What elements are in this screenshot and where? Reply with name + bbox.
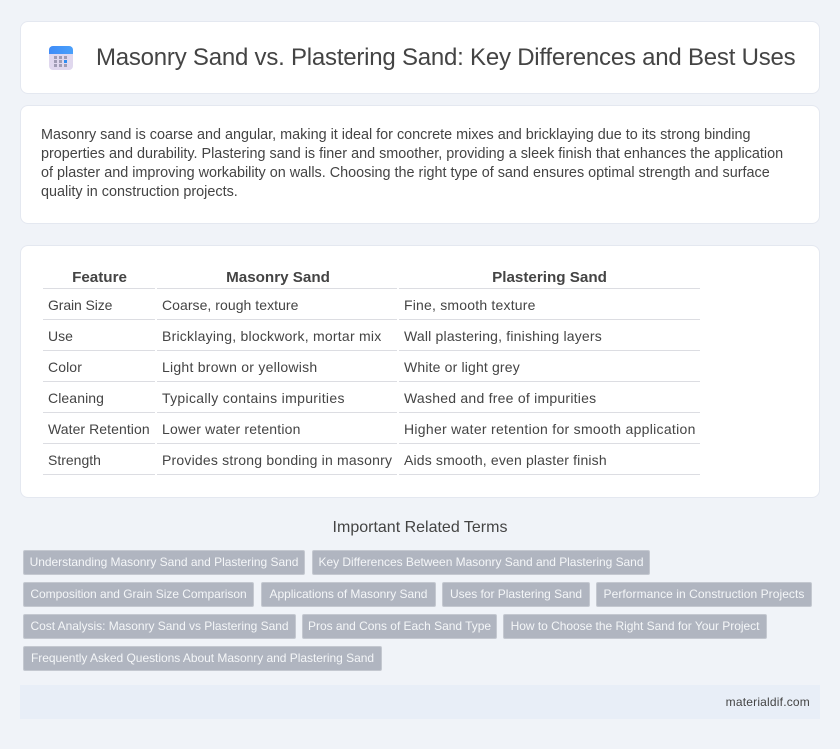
row: grain size xyxy=(48,297,536,313)
tag: Frequently Asked Questions About Masonry and Plastering Sand xyxy=(31,651,374,665)
tag: How to Choose the Right Sand for Your Project xyxy=(511,619,759,633)
tag: Understanding Masonry Sand and Plastering Sand xyxy=(30,555,298,569)
tag xyxy=(23,550,305,575)
table header xyxy=(72,269,607,286)
row: cleaning: Washed and free of impurities xyxy=(404,390,596,406)
intro paragraph: quality in construction projects. xyxy=(41,184,238,200)
row: strength xyxy=(48,452,607,468)
row: cleaning xyxy=(48,390,596,406)
table header: Feature xyxy=(72,269,127,286)
tag: Uses for Plastering Sand xyxy=(450,587,582,601)
tag xyxy=(503,614,767,639)
row: grain size: Fine, smooth texture xyxy=(404,297,536,313)
tag xyxy=(312,550,650,575)
table header: Masonry Sand xyxy=(226,269,330,286)
tag: Pros and Cons of Each Sand Type xyxy=(308,619,491,633)
row: use: Wall plastering, finishing layers xyxy=(404,328,602,344)
intro paragraph: Masonry sand is coarse and angular, making it ideal for concrete mixes and bricklaying due to its strong binding xyxy=(41,127,751,143)
row: color: White or light grey xyxy=(404,359,520,375)
tag: Composition and Grain Size Comparison xyxy=(30,587,247,601)
row: strength: Aids smooth, even plaster finish xyxy=(404,452,607,468)
panel: comparison table xyxy=(20,245,820,498)
tag xyxy=(23,582,254,607)
title: Masonry Sand vs. Plastering Sand: Key Differences and Best Uses xyxy=(96,44,795,71)
tag xyxy=(23,614,296,639)
row: use: Use xyxy=(48,328,73,344)
panel: intro text xyxy=(20,105,820,224)
footer bar xyxy=(20,685,820,719)
related terms heading: Important Related Terms xyxy=(333,519,507,536)
footer source: materialdif.com xyxy=(726,695,810,709)
tag xyxy=(442,582,590,607)
row: grain size: Coarse, rough texture xyxy=(162,297,298,313)
row: use xyxy=(48,328,602,344)
row: water retention: Lower water retention xyxy=(162,421,301,437)
row: water retention: Higher water retention for smooth application xyxy=(404,421,696,437)
tag xyxy=(596,582,812,607)
row: strength: Strength xyxy=(48,452,101,468)
header panel xyxy=(20,21,820,94)
row: water retention xyxy=(48,421,696,437)
tag xyxy=(23,646,382,671)
row: color: Light brown or yellowish xyxy=(162,359,317,375)
intro paragraph: properties and durability. Plastering sand is finer and smoother, providing a sleek finish that enhances the application xyxy=(41,146,783,162)
row: color: Color xyxy=(48,359,82,375)
icon: calendar xyxy=(49,46,73,70)
tag: Cost Analysis: Masonry Sand vs Plastering Sand xyxy=(30,619,289,633)
row: cleaning: Typically contains impurities xyxy=(162,390,345,406)
row: cleaning: Cleaning xyxy=(48,390,104,406)
intro paragraph: of plaster and improving workability on walls. Choosing the right type of sand ensures optimal strength and surface xyxy=(41,165,770,181)
row: grain size: Grain Size xyxy=(48,297,112,313)
row: water retention: Water Retention xyxy=(48,421,150,437)
tag: Performance in Construction Projects xyxy=(604,587,804,601)
row: strength: Provides strong bonding in masonry xyxy=(162,452,392,468)
tag: Applications of Masonry Sand xyxy=(270,587,427,601)
row: use: Bricklaying, blockwork, mortar mix xyxy=(162,328,381,344)
table header: Plastering Sand xyxy=(492,269,607,286)
tag: Key Differences Between Masonry Sand and Plastering Sand xyxy=(319,555,643,569)
intro paragraph xyxy=(41,127,783,200)
comparison table xyxy=(43,269,700,475)
row: color xyxy=(48,359,520,375)
tag xyxy=(261,582,436,607)
related terms tags xyxy=(23,550,812,671)
tag xyxy=(302,614,497,639)
